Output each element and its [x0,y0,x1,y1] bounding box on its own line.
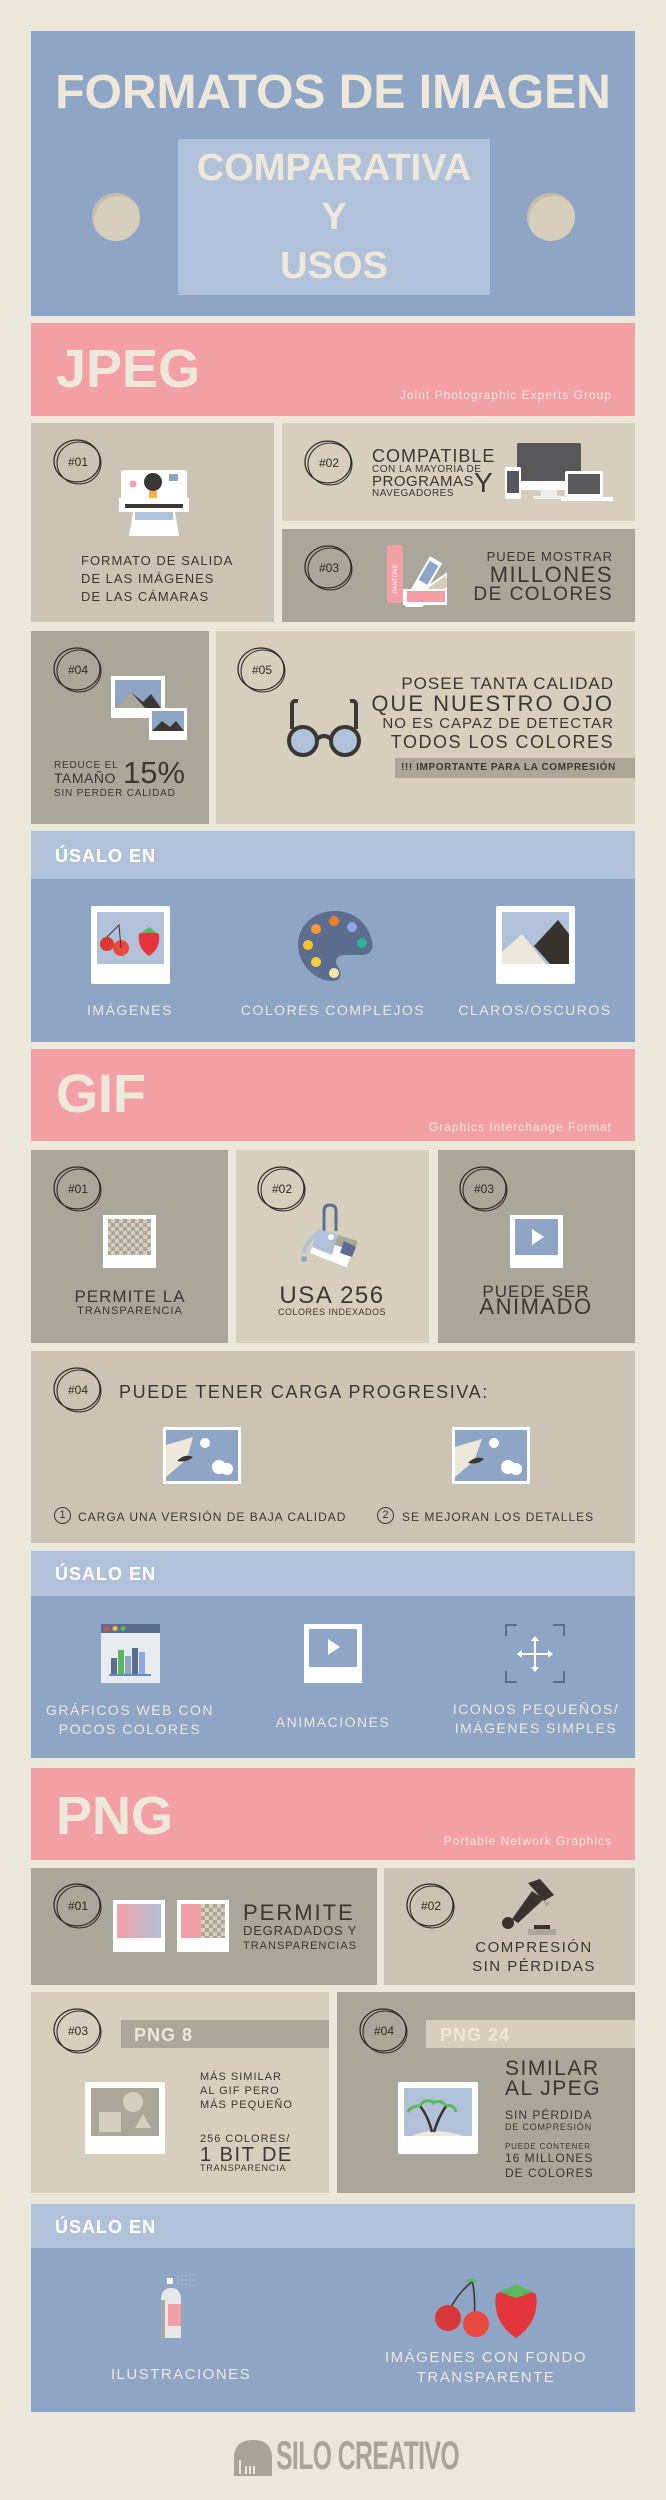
badge [359,2008,408,2054]
panel: jpeg 05: TODOS LOS COLORES [391,732,614,752]
panel: gif usalo en: ANIMACIONES [276,1714,390,1730]
badge: #02 [421,1899,441,1913]
panel: png usalo en: IMÁGENES CON FONDO [385,2349,587,2366]
panel: png usalo en [31,2204,635,2412]
icon: video frame [510,1215,563,1268]
JPEG band: JPEG [56,339,200,399]
text [372,446,495,499]
logo: SILO CREATIVO [276,2434,459,2478]
panel: png 04: SIN PÉRDIDA [505,2108,593,2122]
tag: PNG 8: PNG 8 [134,2025,193,2045]
panel: gif 01 [31,1150,228,1343]
GIF band: GIF [56,1064,146,1124]
icon: pantone fan: PANTONE [393,565,399,593]
icon: gradient frame [113,1900,165,1952]
panel: jpeg usalo en: CLAROS/OSCUROS [458,1002,612,1018]
badge [53,1367,102,1412]
text: COMPATIBLE [372,446,495,466]
icon: island frame [398,2082,478,2154]
text: REDUCE EL [54,760,118,771]
icon: glasses [287,699,361,757]
decorative knob left [92,193,140,241]
panel: jpeg 05: QUE NUESTRO OJO [371,691,614,716]
labels: GRÁFICOS WEB CON [46,1702,214,1718]
panel: jpeg 05 [216,631,635,824]
GIF band: Graphics Interchange Format [429,1120,612,1134]
callout strip: !!! IMPORTANTE PARA LA COMPRESIÓN [401,762,616,773]
badge [459,1166,508,1212]
panel: gif 04 [31,1351,635,1543]
icon: camera [119,470,189,536]
panel: jpeg 04 [31,631,209,824]
panel: jpeg 03: DE COLORES [473,584,613,605]
panel: gif usalo en: IMÁGENES SIMPLES [455,1720,617,1736]
icon: landscape [496,906,575,984]
panel: jpeg 04: TAMAÑO [54,770,116,786]
heading [31,2204,635,2248]
icon: expand [505,1624,565,1683]
text: PERMITE LA [74,1287,186,1306]
panel: gif 03: ANIMADO [479,1294,593,1319]
text: PROGRAMAS [372,473,474,490]
panel: png 01: DEGRADADOS Y [243,1923,357,1938]
badge: #05 [252,663,272,677]
badge [406,1883,454,1928]
tag: PNG 24 [426,2020,635,2048]
text: CON LA MAYORÍA DE [372,464,481,475]
icon: video [304,1624,362,1683]
text: POSEE TANTA CALIDAD [401,674,614,693]
badge: #04 [374,2024,394,2038]
labels: ILUSTRACIONES [111,2366,251,2383]
badge: #04 [68,663,88,677]
PNG band [31,1768,635,1860]
text: PERMITE [243,1900,355,1925]
panel: png 03 [31,1992,329,2193]
badge: #03 [474,1182,494,1196]
icon: fruits picture [91,906,170,984]
panel: gif 03 [438,1150,635,1343]
text: COMPRESIÓN [475,1939,593,1956]
panel: png 04: 16 MILLONES [505,2151,593,2165]
icon: low quality image [163,1427,241,1484]
panel: gif 02 [236,1150,429,1343]
heading: PUEDE TENER CARGA PROGRESIVA: [119,1382,489,1402]
title: FORMATOS DE IMAGEN [55,66,611,119]
panel: png usalo en: TRANSPARENTE [417,2369,555,2386]
heading [31,831,635,879]
icon: palette [298,911,372,981]
badge [257,1166,306,1212]
panel: png 04 [337,1992,635,2193]
subtitle box: Y [321,196,347,238]
text: SIMILAR [505,2057,600,2080]
panel: png 01: TRANSPARENCIAS [243,1940,357,1952]
panel: gif usalo en: ICONOS PEQUEÑOS/ [453,1701,619,1717]
icon: gavel [502,1879,556,1935]
text: USA 256 [279,1282,385,1309]
panel: jpeg 05: NO ES CAPAZ DE DETECTAR [382,715,614,732]
labels: IMÁGENES [87,1002,173,1018]
panel: png 03: 256 COLORES/ [200,2133,290,2145]
heading [31,1551,635,1596]
panel: jpeg 02 [282,423,635,521]
panel: jpeg 01: DE LAS CÁMARAS [81,589,209,604]
tag: PNG 24: PNG 24 [440,2025,510,2045]
text: PUEDE MOSTRAR [487,549,613,564]
panel: jpeg 03 [282,529,635,622]
text: FORMATO DE SALIDA [81,553,233,568]
panel: png 04: PUEDE CONTENER [505,2142,591,2151]
icon: pantone fan [387,545,447,607]
badge: #02 [272,1182,292,1196]
icon: paint bucket [301,1204,358,1267]
tag: PNG 8 [121,2020,329,2048]
badge: #03 [319,561,339,575]
JPEG band [31,323,635,416]
panel: gif 01: TRANSPARENCIA [77,1305,183,1317]
badge: #01 [68,1182,88,1196]
panel: gif usalo en [31,1551,635,1758]
panel: png 02 [384,1868,635,1985]
heading: ÚSALO EN [55,846,156,866]
badge [53,2008,102,2054]
panel: gif 02: COLORES INDEXADOS [278,1307,386,1317]
panel: jpeg 04: SIN PERDER CALIDAD [54,788,176,799]
subtitle box: USOS [280,245,388,287]
icon: spray can [161,2274,195,2338]
panel: jpeg 04: 15% [123,755,185,790]
text: MÁS SIMILAR [200,2071,282,2083]
badge [304,440,352,486]
panel: gif usalo en: POCOS COLORES [59,1721,201,1737]
panel: png 04: DE COLORES [505,2166,594,2180]
badge: #03 [68,2024,88,2038]
panel: png 03: 1 BIT DE [200,2144,293,2166]
panel: jpeg 01 [31,423,274,622]
panel: png 03: AL GIF PERO [200,2085,280,2097]
PNG band: PNG [56,1786,173,1846]
icon: images [111,676,187,740]
panel: png 03: TRANSPARENCIA [200,2163,286,2173]
panel: jpeg usalo en [31,831,635,1042]
badge: #04 [68,1383,88,1397]
caption 1: CARGA UNA VERSIÓN DE BAJA CALIDAD [78,1510,346,1524]
icon: shapes frame [85,2082,165,2154]
badge [53,439,102,484]
badge [304,545,352,590]
icon: cherries and strawberry [435,2279,537,2338]
heading: ÚSALO EN [55,2217,156,2237]
badge [53,1883,102,1928]
panel: png 04: DE COMPRESIÓN [505,2122,592,2132]
badge [53,1166,102,1212]
GIF band [31,1049,635,1141]
subtitle box [178,139,490,295]
panel: png 03: MÁS PEQUEÑO [200,2099,293,2111]
panel: jpeg 03: MILLONES [490,562,613,587]
badge [237,647,286,692]
panel: jpeg usalo en: COLORES COMPLEJOS [241,1002,425,1018]
subtitle box: COMPARATIVA [197,147,471,189]
PNG band: Portable Network Graphics [444,1834,612,1848]
badge: #01 [68,1899,88,1913]
panel: jpeg 01: DE LAS IMÁGENES [81,571,214,586]
decorative knob right [527,193,575,241]
panel: png 02: SIN PÉRDIDAS [472,1958,596,1975]
caption 2: 2 [382,1509,389,1521]
badge: #02 [319,456,339,470]
icon: transparency frame [103,1215,156,1268]
text: NAVEGADORES [372,488,454,499]
icon: transparency frame [177,1900,229,1952]
header panel [31,31,635,316]
caption 2: SE MEJORAN LOS DETALLES [402,1510,594,1524]
panel: png 04: AL JPEG [505,2077,601,2100]
badge: #01 [68,455,88,469]
badge [53,647,102,692]
JPEG band: Joint Photographic Experts Group [400,388,612,402]
heading: ÚSALO EN [55,1564,156,1584]
icon: detailed image [452,1427,530,1484]
panel: jpeg 02: Y [474,467,493,498]
icon: devices [505,443,613,501]
text: PUEDE SER [482,1282,590,1301]
caption 1: 1 [59,1509,66,1521]
panel: png 01 [31,1868,377,1985]
icon: browser chart [101,1624,160,1683]
callout strip [395,758,635,778]
